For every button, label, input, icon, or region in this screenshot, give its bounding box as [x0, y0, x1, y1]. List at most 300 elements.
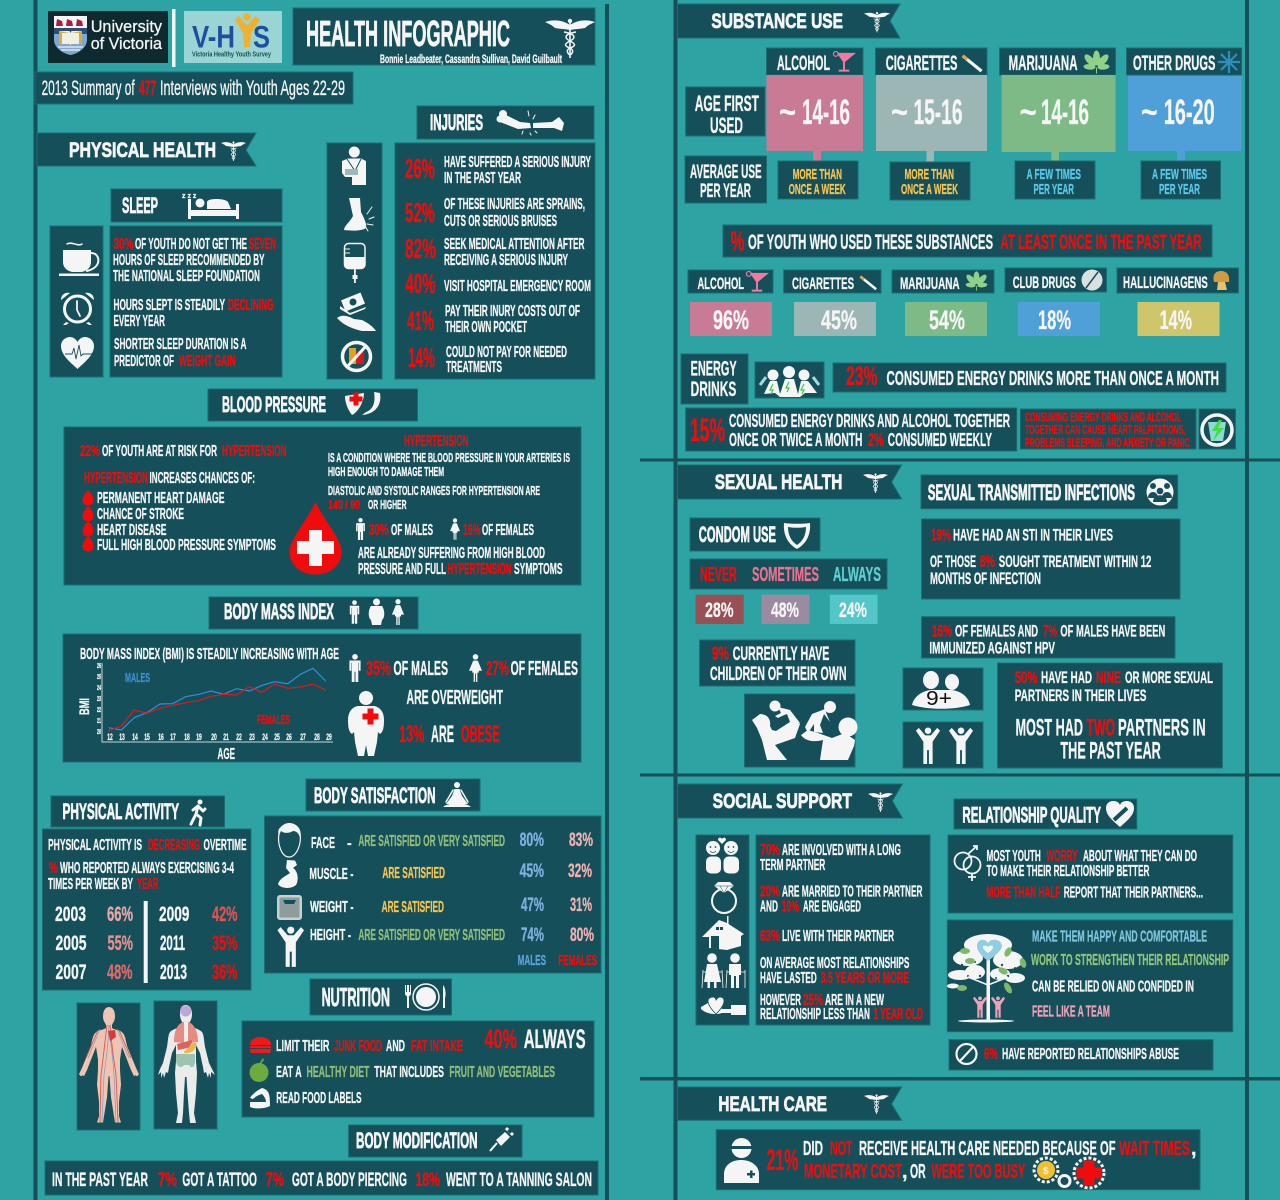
icon: tattoo syringe — [490, 1128, 513, 1151]
list: hypertension risks: HEART DISEASE — [97, 522, 167, 539]
icon: pressure cuff — [345, 392, 380, 415]
stat: never 28% — [696, 595, 744, 624]
table: exercise by year: 2003 — [55, 903, 86, 926]
icon: gears with money and cross — [1034, 1158, 1104, 1188]
stat: 15% with alcohol: CONSUMED WEEKLY — [888, 429, 992, 450]
panel: body modification: GOT A BODY PIERCING — [292, 1169, 407, 1191]
column: cigarettes: ONCE A WEEK — [901, 181, 958, 198]
panel: partner qualities — [947, 920, 1233, 1032]
panel: sexual partners: HAVE HAD — [1041, 668, 1092, 687]
panel: body satisfaction: ARE SATISFIED OR VERY SATISFIED — [358, 833, 505, 850]
list: hypertension risks: CHANCE OF STROKE — [97, 506, 184, 523]
panel: relationship facts: 10% — [782, 899, 799, 916]
panel: bmi: 13% — [399, 721, 424, 748]
panel: body satisfaction: 80% — [520, 830, 544, 851]
panel: hypertension: ARE ALREADY SUFFERING FROM HIGH BLOOD — [358, 545, 545, 562]
column: alcohol: 14-16 — [802, 93, 850, 132]
table: exercise by year: 48% — [107, 961, 133, 984]
panel: nutrition: READ FOOD LABELS — [276, 1090, 362, 1107]
line chart: bmi by age: 22 — [236, 732, 242, 742]
icon: Y person — [235, 13, 260, 47]
legend: condom use: SOMETIMES — [752, 564, 819, 586]
stat: alcohol 96%: ALCOHOL — [698, 274, 744, 293]
panel: injury facts: IN THE PAST YEAR — [444, 170, 521, 187]
panel: physical activity: YEAR — [137, 876, 159, 893]
panel: hypertension: HYPERTENSION — [404, 433, 468, 450]
panel: nutrition: EAT A — [276, 1064, 302, 1081]
stat: sometimes 48%: 48% — [771, 599, 799, 622]
panel: injury facts: HAVE SUFFERED A SERIOUS INJURY — [444, 154, 591, 171]
panel: health care: OR — [910, 1161, 926, 1183]
panel: body modification: WENT TO A TANNING SALON — [446, 1169, 592, 1191]
panel: relationship facts: ON AVERAGE MOST RELATIONSHIPS — [760, 955, 909, 972]
icon: muscle arm — [278, 860, 298, 888]
panel: body satisfaction — [264, 816, 601, 973]
panel: relationship facts: LIVE WITH THEIR PARTNER — [782, 928, 894, 945]
line chart: bmi by age: 24 — [262, 732, 268, 742]
panel: hypertension: 16% — [463, 522, 480, 539]
icon: meditating figure — [443, 782, 471, 807]
line chart: bmi by age: 15 — [144, 732, 150, 742]
panel: nutrition: FRUIT AND VEGETABLES — [449, 1064, 555, 1081]
icon: apple — [250, 1058, 268, 1082]
column: other drugs: ~ — [1141, 93, 1158, 132]
panel: physical activity: PHYSICAL ACTIVITY IS — [48, 837, 142, 854]
column: cigarettes: 15-16 — [914, 93, 962, 132]
panel: circulatory figure — [77, 1003, 140, 1130]
panel: physical activity: OVERTIME — [204, 837, 247, 854]
icon: energetic friends — [755, 362, 824, 398]
icon: heart with bandage — [1106, 801, 1134, 827]
panel: hypertension: OR HIGHER — [368, 498, 406, 512]
panel: sexual partners: OR MORE SEXUAL — [1125, 668, 1213, 687]
line chart: bmi by age: 24 — [97, 685, 101, 692]
stat: hallucinogens 14% — [1117, 268, 1238, 336]
panel: health care: , — [1191, 1138, 1197, 1160]
panel: hypertension: 22% — [80, 443, 100, 460]
panel: sexual partners: 50% — [1015, 668, 1038, 687]
logo: V-HYS: S — [253, 18, 270, 54]
panel: relationship facts: AND — [760, 899, 778, 916]
title panel — [293, 8, 595, 66]
table: exercise by year: 36% — [212, 961, 238, 984]
panel: sexual partners: THE PAST YEAR — [1060, 738, 1161, 765]
panel: body satisfaction: MALES — [518, 952, 546, 969]
panel: relationship facts: ARE IN A NEW — [825, 992, 884, 1009]
banner: percent of youth: OF YOUTH WHO USED THESE SUBSTANCES — [748, 231, 993, 254]
stat: cigarettes 45% — [784, 270, 881, 336]
heading: condom use — [690, 518, 820, 551]
table: exercise by year: 2007 — [56, 961, 86, 984]
icon: burger — [250, 1037, 271, 1053]
stat: marijuana 54%: MARIJUANA — [900, 274, 960, 293]
section ribbon: social support: SOCIAL SUPPORT — [713, 790, 852, 813]
label: age first used: USED — [710, 113, 743, 138]
icon: doctor — [724, 1138, 759, 1183]
column: marijuana: MARIJUANA — [1009, 52, 1078, 75]
summary banner — [35, 72, 353, 104]
panel: health care: , — [902, 1161, 908, 1183]
stat: children: CURRENTLY HAVE — [733, 644, 829, 665]
icon: gears with money and cross: $ — [1043, 1166, 1049, 1177]
icon: money in hand — [337, 293, 376, 331]
line chart: bmi by age: BMI — [76, 698, 92, 715]
panel: body satisfaction: 74% — [521, 925, 544, 946]
panel: partner qualities: FEEL LIKE A TEAM — [1032, 1004, 1110, 1021]
logo divider — [172, 9, 176, 67]
panel: injury facts: OF THESE INJURIES ARE SPRAINS, — [444, 196, 585, 213]
icon: couple — [706, 838, 739, 874]
line chart: bmi by age: 26 — [286, 732, 292, 742]
icon: university crest — [54, 16, 87, 55]
column: alcohol: MORE THAN — [793, 166, 842, 183]
panel: body satisfaction: MUSCLE - — [309, 866, 353, 883]
panel: relationship facts: RELATIONSHIP LESS THAN — [760, 1006, 870, 1023]
banner: percent of youth: % — [731, 226, 745, 256]
panel: injury facts: 82% — [405, 233, 436, 264]
panel: hypertension: PRESSURE AND FULL — [358, 561, 446, 578]
icon: house — [702, 916, 744, 950]
line chart: bmi by age: 22 — [97, 707, 101, 714]
label: average use per year: AVERAGE USE — [690, 162, 762, 183]
heading: sexually transmitted infections — [921, 475, 1178, 509]
panel: body satisfaction: 47% — [521, 895, 544, 916]
title: HEALTH INFOGRAPHIC — [306, 13, 510, 54]
panel: sleep icons — [50, 226, 103, 377]
column: alcohol: ALCOHOL — [777, 52, 830, 75]
panel: bmi: ARE OVERWEIGHT — [406, 687, 503, 709]
label: average use per year — [685, 156, 766, 203]
panel: hypertension: SYMPTOMS — [514, 561, 563, 578]
logo: University of Victoria: University — [91, 17, 162, 36]
panel: body modification: GOT A TATTOO — [182, 1169, 257, 1191]
panel: physical activity: % — [49, 860, 58, 877]
heading: relationship quality: RELATIONSHIP QUALITY — [962, 803, 1101, 828]
icon: bed: z z z — [182, 193, 197, 200]
panel: organs figure — [154, 1001, 217, 1129]
heading: body modification — [349, 1125, 522, 1157]
stat: never 28%: 28% — [705, 599, 734, 622]
panel: health care: 21% — [766, 1144, 798, 1177]
table: exercise by year: 2013 — [160, 961, 187, 984]
icon: two partners — [903, 722, 983, 768]
column: marijuana: A FEW TIMES — [1026, 166, 1081, 183]
column: marijuana: PER YEAR — [1034, 181, 1074, 198]
column: other drugs: A FEW TIMES — [1152, 166, 1207, 183]
line chart: bmi by age: 20 — [97, 729, 101, 736]
legend: condom use: NEVER — [700, 564, 737, 586]
section ribbon: health care — [678, 1087, 902, 1120]
line chart: bmi by age: 25 — [274, 732, 280, 742]
panel: nutrition: THAT INCLUDES — [374, 1064, 444, 1081]
icon: runner — [191, 800, 205, 825]
panel: bmi — [63, 634, 581, 763]
panel: relationship facts — [756, 835, 930, 1025]
panel: hypertension: 30% — [369, 522, 388, 539]
stat: children: 9% — [712, 644, 729, 665]
panel: hypertension: HYPERTENSION — [84, 470, 148, 487]
line chart: bmi by age: 13 — [119, 732, 125, 742]
panel: relationship facts: TERM PARTNER — [760, 857, 825, 874]
logo: University of Victoria: of Victoria — [91, 34, 163, 53]
panel: nutrition: JUNK FOOD — [334, 1038, 382, 1055]
stat: 15% with alcohol: CONSUMED ENERGY DRINKS AND ALCOHOL TOGETHER — [729, 410, 1010, 431]
panel: sleep facts: DECLINING — [228, 297, 274, 314]
panel: physical activity: WHO REPORTED ALWAYS EXERCISING 3-4 — [60, 860, 234, 877]
icon: arm sling — [342, 146, 366, 185]
panel: sexual partners: MOST HAD — [1016, 715, 1083, 742]
panel: hpv: IMMUNIZED AGAINST HPV — [929, 639, 1055, 658]
panel: bmi: OF FEMALES — [511, 658, 578, 680]
icon: mushroom — [1213, 271, 1229, 290]
panel: nutrition: ALWAYS — [524, 1024, 586, 1054]
panel: sleep facts: EVERY YEAR — [114, 313, 165, 330]
panel: sexual partners: PARTNERS IN — [1118, 715, 1206, 742]
label: age first used: AGE FIRST — [695, 91, 759, 116]
icon: overweight figure with cross — [348, 691, 384, 756]
icon: bathroom scale — [277, 895, 302, 920]
stat: children — [700, 640, 855, 686]
panel: relationship facts: ARE ENGAGED — [803, 899, 861, 916]
stat: 15% with alcohol — [686, 408, 1017, 451]
stat: alcohol 96%: 96% — [713, 305, 749, 335]
panel: sleep facts: OF YOUTH DO NOT GET THE — [135, 236, 247, 253]
panel: body satisfaction: ARE SATISFIED — [382, 899, 444, 916]
summary banner: 477 — [139, 77, 156, 100]
panel: sleep facts: SEVEN — [249, 236, 276, 253]
panel: relationship worries: MORE THAN HALF — [986, 885, 1060, 902]
panel: relationship facts: 63% — [760, 928, 780, 945]
line chart: bmi by age: 27 — [300, 732, 306, 742]
panel: hypertension: HIGH ENOUGH TO DAMAGE THEM — [328, 465, 444, 479]
stat: cigarettes 45%: CIGARETTES — [792, 274, 854, 293]
panel: relationship facts: 25% — [803, 992, 823, 1009]
panel: health care: WERE TOO BUSY — [931, 1161, 1026, 1183]
line chart: bmi by age: 26 — [97, 663, 101, 670]
icon: prohibition — [956, 1044, 976, 1064]
icon: gender symbols — [954, 846, 980, 881]
logo: V-HYS: Victoria Healthy Youth Survey — [192, 52, 271, 58]
stat: marijuana 54%: 54% — [929, 305, 965, 335]
panel: sleep facts — [110, 226, 282, 377]
legend: condom use — [690, 559, 887, 589]
panel: hypertension — [64, 427, 581, 585]
panel: health care: NOT — [830, 1138, 853, 1160]
stat: hallucinogens 14%: 14% — [1160, 305, 1192, 335]
panel: sti: 8% — [980, 552, 995, 571]
panel: relationship facts: ARE INVOLVED WITH A LONG — [782, 842, 901, 859]
stat: marijuana 54% — [892, 270, 994, 336]
logo: V-HYS — [184, 11, 282, 63]
panel: hypertension: OF FEMALES — [482, 522, 534, 539]
icon: alarm clock — [61, 293, 94, 325]
icon: iv bag — [344, 244, 365, 283]
panel: sti: SOUGHT TREATMENT WITHIN 12 — [999, 552, 1151, 571]
panel: bmi: ARE — [431, 721, 454, 748]
panel: injury facts: PAY THEIR INURY COSTS OUT OF — [445, 303, 580, 320]
panel: sti: HAVE HAD AN STI IN THEIR LIVES — [953, 526, 1113, 545]
icon: caduceus — [545, 19, 595, 58]
warning: energy drinks risks — [1020, 409, 1196, 450]
heading: physical activity: PHYSICAL ACTIVITY — [62, 799, 179, 824]
panel: injury facts: CUTS OR SERIOUS BRUISES — [444, 213, 557, 230]
authors: Bonnie Leadbeater, Cassandra Sullivan, David Guilbault — [380, 54, 562, 66]
section ribbon: health care: HEALTH CARE — [718, 1093, 827, 1116]
label: average use per year: PER YEAR — [700, 181, 751, 202]
heading: body mass index: BODY MASS INDEX — [224, 599, 334, 624]
column: other drugs: PER YEAR — [1159, 181, 1200, 198]
panel: sexual partners: PARTNERS IN THEIR LIVES — [1015, 686, 1146, 705]
table: exercise by year: 55% — [108, 932, 133, 955]
panel: sti: MONTHS OF INFECTION — [930, 569, 1041, 588]
panel: bmi: 35% — [366, 658, 391, 680]
column: cigarettes: CIGARETTES — [886, 52, 958, 75]
panel: injury facts: THEIR OWN POCKET — [445, 319, 527, 336]
panel: nutrition: 40% — [484, 1024, 517, 1054]
panel: relationship abuse — [949, 1040, 1213, 1070]
panel: nutrition: AND — [386, 1038, 405, 1055]
line chart: bmi by age: 28 — [314, 732, 320, 742]
panel: injury facts: 41% — [407, 305, 434, 336]
panel: sexual partners: NINE — [1096, 668, 1121, 687]
icon: heart beat — [61, 337, 94, 369]
icon: food label — [250, 1088, 270, 1108]
table: exercise by year — [55, 901, 238, 984]
stat: alcohol 96% — [688, 270, 773, 336]
panel: hpv: 7% — [1043, 622, 1057, 641]
section ribbon: substance use: SUBSTANCE USE — [711, 10, 843, 33]
panel: relationship facts: HAVE LASTED — [760, 970, 817, 987]
summary banner: Interviews with Youth Ages 22-29 — [160, 77, 345, 100]
icon: love tree — [947, 934, 1028, 1022]
panel: body modification: 18% — [416, 1169, 440, 1191]
stat: hallucinogens 14%: HALLUCINAGENS — [1123, 273, 1208, 292]
panel: hpv: OF FEMALES AND — [955, 622, 1038, 641]
section ribbon: social support — [678, 784, 902, 818]
banner: percent of youth — [723, 225, 1212, 257]
logo: University of Victoria — [48, 11, 168, 63]
column: marijuana — [1000, 48, 1116, 199]
section ribbon: substance use — [678, 4, 900, 38]
panel: body satisfaction: 31% — [570, 895, 592, 916]
stat: children: CHILDREN OF THEIR OWN — [710, 664, 846, 685]
panel: injury facts: VISIT HOSPITAL EMERGENCY ROOM — [444, 278, 591, 295]
panel: relationship worries: MOST YOUTH — [986, 848, 1041, 865]
column: alcohol — [766, 48, 863, 199]
line chart: bmi by age — [76, 663, 333, 763]
stat: 23% energy drinks: 23% — [846, 361, 878, 391]
line chart: bmi by age: MALES — [125, 670, 150, 685]
panel: injury facts: 26% — [405, 153, 435, 184]
column: other drugs: 16-20 — [1164, 93, 1215, 132]
icon: injured foot — [344, 198, 374, 231]
column: other drugs — [1126, 48, 1242, 199]
panel: sexual partners: TWO — [1086, 715, 1115, 742]
list: hypertension risks: FULL HIGH BLOOD PRESSURE SYMPTOMS — [97, 537, 276, 554]
icon: no energy drink — [1199, 409, 1236, 449]
panel: body modification: 7% — [266, 1169, 284, 1191]
icon: plate and cutlery — [405, 984, 446, 1010]
heading: nutrition: NUTRITION — [322, 982, 390, 1012]
line chart: bmi by age: 29 — [326, 732, 332, 742]
panel: relationship worries: WORRY — [1046, 848, 1078, 865]
icon: overweight figure — [369, 598, 384, 625]
panel: hypertension: HYPERTENSION — [448, 561, 512, 578]
stat: always 24%: 24% — [839, 599, 867, 622]
panel: body satisfaction: - — [347, 835, 352, 851]
panel: nutrition: LIMIT THEIR — [276, 1038, 330, 1055]
icon: group — [1146, 478, 1174, 506]
panel: injury facts: 52% — [405, 197, 435, 228]
table: exercise by year: 42% — [212, 903, 238, 926]
panel: body satisfaction: HEIGHT - — [310, 927, 351, 944]
stat: sometimes 48% — [762, 595, 809, 624]
column: cigarettes: ~ — [891, 93, 908, 132]
panel: injury facts: RECEIVING A SERIOUS INJURY — [444, 252, 568, 269]
panel: sti: 19% — [931, 526, 951, 545]
stat: always 24% — [830, 595, 878, 624]
panel: body satisfaction: ARE SATISFIED — [382, 865, 445, 882]
line chart: bmi by age: 20 — [211, 732, 217, 742]
panel: bmi: OBESE — [461, 721, 500, 748]
column: marijuana: 14-16 — [1041, 93, 1089, 132]
icon: parents lifting babies — [744, 694, 858, 767]
table: exercise by year: 2011 — [160, 932, 185, 955]
section ribbon: physical health: PHYSICAL HEALTH — [69, 139, 216, 162]
panel: hypertension: 140 / 90 — [328, 498, 360, 512]
heading: blood pressure: BLOOD PRESSURE — [222, 392, 326, 417]
panel: hpv: 16% — [932, 622, 952, 641]
heading: body modification: BODY MODIFICATION — [356, 1128, 478, 1153]
panel: relationship facts: 70% — [760, 842, 780, 859]
line chart: bmi by age: 14 — [132, 732, 138, 742]
panel: injury facts: SEEK MEDICAL ATTENTION AFTER — [444, 236, 584, 253]
column: alcohol: ONCE A WEEK — [789, 181, 846, 198]
stat: cigarettes 45%: 45% — [821, 305, 857, 335]
table: exercise by year: 2009 — [159, 903, 189, 926]
logo: V-HYS: V-H — [192, 18, 235, 54]
heading: physical activity — [51, 796, 224, 827]
panel: health care: MONETARY COST — [804, 1161, 902, 1183]
panel: hypertension: OF YOUTH ARE AT RISK FOR — [102, 443, 217, 460]
line chart: bmi by age: 23 — [97, 696, 101, 703]
panel: hpv: OF MALES HAVE BEEN — [1060, 622, 1165, 641]
heading: sleep: SLEEP — [122, 193, 158, 218]
heading: relationship quality — [954, 799, 1137, 829]
panel: bmi: BODY MASS INDEX (BMI) IS STEADILY INCREASING WITH AGE — [80, 646, 339, 663]
panel: health care: DID — [803, 1138, 823, 1160]
column: alcohol: ~ — [779, 93, 796, 132]
label: age first used — [686, 87, 765, 138]
list: hypertension risks: PERMANENT HEART DAMAGE — [97, 490, 225, 507]
panel: sexual partners — [998, 663, 1222, 768]
table: exercise by year: 2005 — [56, 932, 87, 955]
panel: injury facts: 14% — [408, 342, 435, 373]
list: hypertension risks — [83, 490, 276, 554]
panel: injury facts: TREATMENTS — [446, 359, 502, 376]
panel: sleep facts: 30% — [114, 236, 134, 253]
line chart: bmi by age: 12 — [107, 732, 113, 742]
column: cigarettes — [876, 48, 987, 200]
label: energy drinks: ENERGY — [691, 358, 737, 380]
icon: pill — [1082, 270, 1102, 290]
panel: injury facts: 40% — [406, 268, 436, 299]
icon: ring — [712, 882, 736, 913]
panel: injury facts: COULD NOT PAY FOR NEEDED — [446, 344, 567, 361]
line chart: bmi by age: 18 — [184, 732, 190, 742]
panel: relationship facts: HOWEVER — [760, 992, 801, 1009]
label: energy drinks: DRINKS — [691, 378, 736, 401]
